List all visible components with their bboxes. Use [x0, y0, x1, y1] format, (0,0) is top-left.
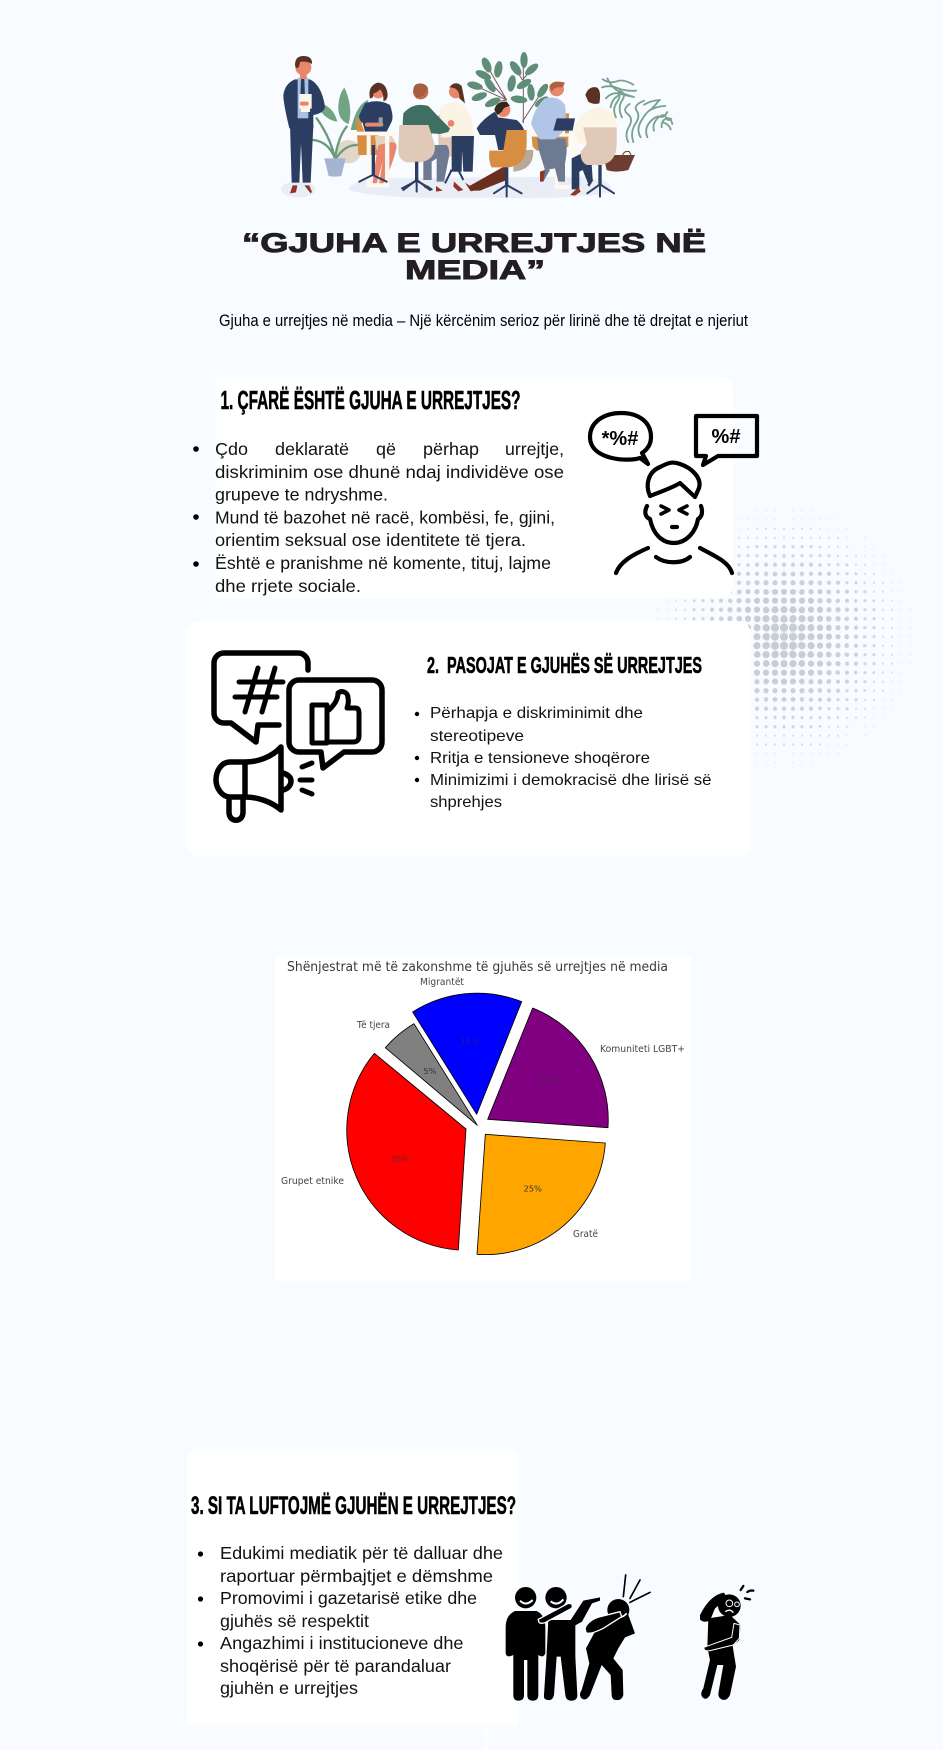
standing man — [283, 56, 325, 193]
man leaning back — [468, 102, 533, 197]
heading: section 2: 2. PASOJAT E GJUHËS SË URREJTJES — [427, 652, 702, 678]
bullet list: solutions: raportuar përmbajtjet e dëmshme — [220, 1566, 493, 1586]
bullet list: definition: grupeve te ndryshme. — [215, 484, 388, 504]
person one — [506, 1587, 545, 1701]
bullet list: definition: dhe rrjete sociale. — [215, 576, 361, 596]
chart title: Shënjestrat më të zakonshme të gjuhës së urrejtjes në media — [287, 960, 668, 975]
big plant — [475, 60, 543, 123]
bullet list: solutions: Edukimi mediatik për të dalluar dhe — [220, 1543, 503, 1563]
category labels: Të tjera — [356, 1020, 390, 1031]
category labels: Komuniteti LGBT+ — [600, 1044, 685, 1055]
remaining chair bases — [359, 175, 432, 189]
bullet list: definition: përhap — [423, 439, 479, 459]
icon: angry man with speech bubbles: %# — [712, 426, 740, 448]
title: “GJUHA E URREJTJES NË — [242, 228, 706, 258]
person two — [538, 1587, 600, 1701]
percentage labels: 15% — [461, 1037, 479, 1047]
heading: section 3: 3. SI TA LUFTOJMË GJUHËN E URREJTJES? — [191, 1492, 516, 1520]
bullet list: definition: diskriminim ose dhunë ndaj individëve ose — [215, 462, 564, 482]
bullet list: definition: që — [376, 439, 396, 459]
left plant — [336, 140, 361, 163]
bullet list: solutions — [198, 1543, 503, 1698]
bullet list: consequences: shprehjes — [430, 794, 502, 811]
title — [242, 228, 706, 285]
bullet list: solutions: shoqërisë për të parandaluar — [220, 1656, 451, 1676]
percentage labels — [391, 1037, 558, 1194]
table — [347, 132, 590, 189]
bullet list: consequences: Përhapja e diskriminimit dhe — [430, 705, 643, 722]
bullet list: solutions: Angazhimi i institucioneve dhe — [220, 1633, 464, 1653]
woman 2 — [438, 83, 477, 191]
category labels: Grupet etnike — [281, 1176, 344, 1187]
person three, cowering — [580, 1575, 650, 1700]
bullet list: solutions: gjuhën e urrejtjes — [220, 1678, 358, 1698]
panel: what is hate speech — [193, 377, 757, 598]
person four, scared — [700, 1586, 753, 1700]
faint white strip at bottom — [484, 1727, 488, 1750]
icon: angry man with speech bubbles — [590, 413, 757, 573]
pie wedges — [347, 993, 608, 1255]
bullet list: definition: deklaratë — [275, 439, 349, 459]
bullet list: definition: urrejtje, — [505, 439, 564, 459]
heading: section 1: 1. ÇFARË ËSHTË GJUHA E URREJTJES? — [220, 387, 520, 415]
icon: bullies pointing at a person — [506, 1575, 753, 1701]
category labels — [281, 977, 685, 1240]
category labels: Gratë — [573, 1229, 598, 1240]
bullet list: consequences: Rritja e tensioneve shoqërore — [430, 750, 650, 767]
man in green — [398, 83, 454, 192]
bullet list: definition — [193, 439, 564, 596]
panel: how to fight hate speech — [187, 1449, 518, 1725]
basket — [603, 155, 635, 172]
subtitle: Gjuha e urrejtjes në media – Një kërcënim serioz për lirinë dhe të drejtat e njeriut — [219, 312, 748, 330]
bullet list: solutions: gjuhës së respektit — [220, 1611, 369, 1631]
bullet list: definition: Çdo — [215, 439, 248, 459]
woman 1 — [356, 83, 397, 183]
bullet list: definition: Është e pranishme në komente, tituj, lajme — [215, 553, 551, 573]
man in cream — [570, 87, 617, 197]
halftone dot pattern — [654, 507, 914, 767]
fern — [602, 78, 672, 142]
bullet list: definition: Mund të bazohet në racë, kombësi, fe, gjini, — [215, 508, 555, 528]
icon: social media hashtag, like and megaphone — [214, 653, 382, 820]
bullet list: consequences — [415, 705, 712, 811]
category labels: Migrantët — [420, 977, 464, 988]
bullet list: consequences: stereotipeve — [430, 728, 524, 745]
bullet list: definition: orientim seksual ose identitete të tjera. — [215, 530, 526, 550]
man in blue — [531, 82, 575, 182]
percentage labels: 5% — [423, 1066, 437, 1076]
pie chart: most common targets — [275, 957, 691, 1281]
illustration: office meeting team — [281, 52, 672, 198]
percentage labels: 35% — [391, 1154, 409, 1164]
title: MEDIA” — [405, 255, 545, 285]
icon: angry man with speech bubbles: *%# — [602, 428, 638, 450]
bullet list: consequences: Minimizimi i demokracisë dhe lirisë së — [430, 772, 712, 789]
percentage labels: 20% — [540, 1075, 558, 1085]
panel: consequences — [186, 621, 751, 856]
percentage labels: 25% — [523, 1184, 542, 1194]
bullet list: solutions: Promovimi i gazetarisë etike dhe — [220, 1588, 477, 1608]
